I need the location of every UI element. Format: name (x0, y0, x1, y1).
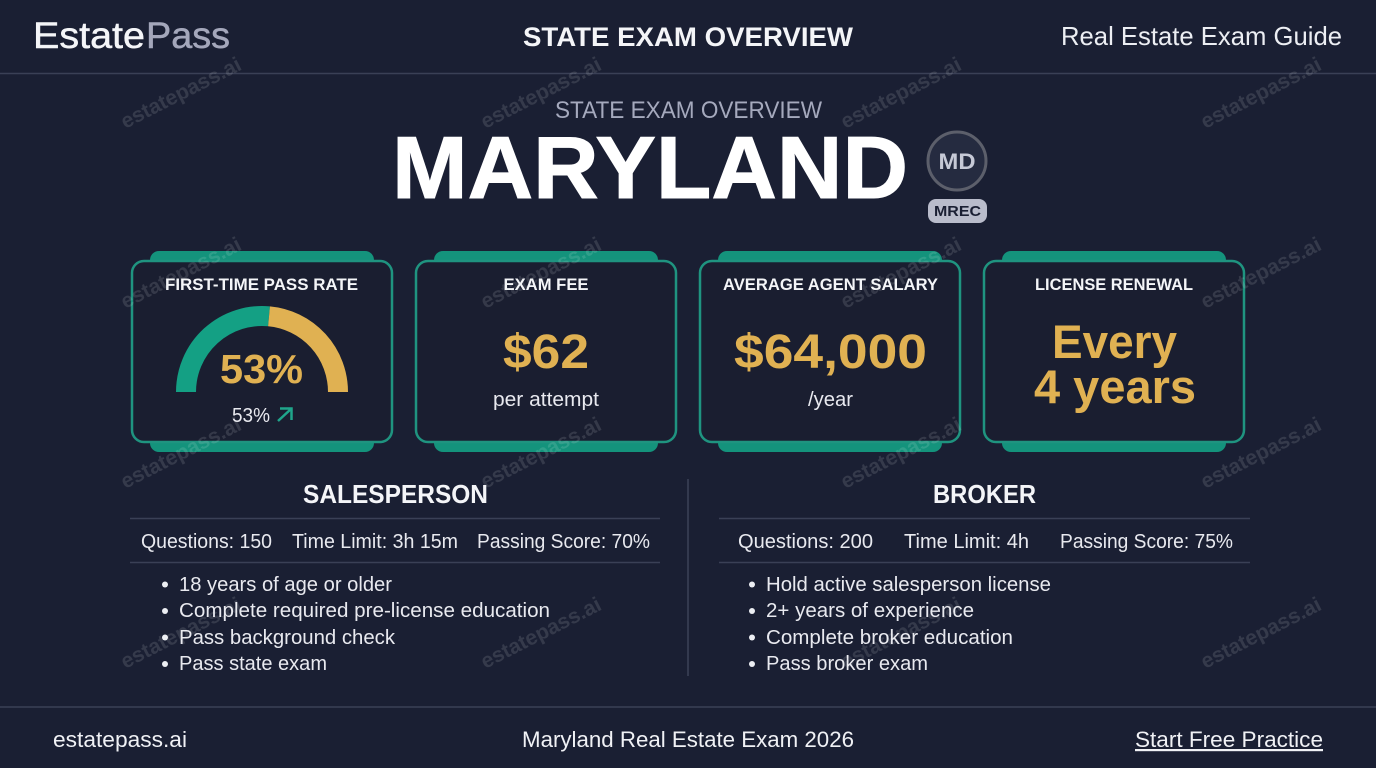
fee unit: per attempt (493, 389, 599, 411)
watermarks: estatepass.ai (477, 413, 605, 493)
watermarks: estatepass.ai (117, 53, 245, 133)
card heading: AVERAGE AGENT SALARY (723, 275, 939, 294)
salesperson stats: Questions: 150 (141, 531, 272, 553)
salary value: $64,000 (734, 326, 927, 379)
state badge: MD (928, 132, 986, 190)
panel: broker (719, 479, 1250, 675)
broker stats: Passing Score: 75% (1060, 531, 1233, 553)
card heading: EXAM FEE (504, 275, 588, 294)
watermarks: estatepass.ai (117, 233, 245, 313)
salesperson requirements (162, 574, 550, 675)
salesperson stats (141, 531, 650, 553)
gauge value: 53% (220, 346, 303, 392)
agency pill: MREC (928, 199, 987, 223)
footer caption: Maryland Real Estate Exam 2026 (522, 727, 854, 752)
small percent: 53% (232, 405, 270, 427)
icon: trend arrow (278, 408, 292, 421)
agency pill: MREC: MREC (934, 203, 981, 220)
salary unit: /year (808, 389, 853, 411)
broker requirements: 2+ years of experience (766, 600, 974, 622)
broker requirements: Pass broker exam (766, 653, 928, 675)
watermarks: estatepass.ai (1197, 233, 1325, 313)
salesperson requirements: Complete required pre-license education (179, 600, 550, 622)
salesperson stats: Time Limit: 3h 15m (292, 531, 458, 553)
panel: average agent salary (700, 251, 960, 452)
salesperson stats: Passing Score: 70% (477, 531, 650, 553)
salesperson requirements: Pass background check (179, 627, 396, 649)
state badge: MD: MD (938, 149, 976, 174)
watermarks: estatepass.ai (477, 593, 605, 673)
card heading: FIRST-TIME PASS RATE (165, 275, 358, 294)
broker stats: Time Limit: 4h (904, 531, 1029, 553)
broker stats: Questions: 200 (738, 531, 873, 553)
panel: first-time pass rate (132, 251, 392, 452)
panel: salesperson (130, 479, 660, 675)
panel: license renewal (984, 251, 1244, 452)
state name title: MARYLAND (392, 118, 908, 217)
watermarks: estatepass.ai (117, 413, 245, 493)
renewal value: 4 years (1034, 360, 1196, 413)
broker requirements: Complete broker education (766, 627, 1013, 649)
subtitle: STATE EXAM OVERVIEW (555, 97, 822, 124)
renewal value: Every (1052, 315, 1177, 368)
salesperson requirements: 18 years of age or older (179, 574, 392, 596)
broker requirements (749, 574, 1051, 675)
header guide label: Real Estate Exam Guide (1061, 21, 1342, 51)
watermarks (117, 53, 1325, 673)
watermarks: estatepass.ai (837, 593, 965, 673)
gauge chart (186, 316, 338, 392)
watermarks: estatepass.ai (477, 233, 605, 313)
header title: STATE EXAM OVERVIEW (523, 22, 854, 52)
footer call to action: Start Free Practice (1135, 727, 1323, 752)
salesperson requirements: Pass state exam (179, 653, 327, 675)
renewal value (1034, 315, 1196, 413)
watermarks: estatepass.ai (837, 413, 965, 493)
footer site: estatepass.ai (53, 727, 187, 752)
logo: Estate (33, 15, 145, 56)
fee value: $62 (503, 326, 589, 379)
footer bar (0, 707, 1376, 752)
watermarks: estatepass.ai (477, 53, 605, 133)
logo (33, 15, 230, 56)
salesperson heading: SALESPERSON (303, 479, 488, 509)
watermarks: estatepass.ai (837, 53, 965, 133)
watermarks: estatepass.ai (1197, 53, 1325, 133)
watermarks: estatepass.ai (1197, 593, 1325, 673)
broker heading: BROKER (933, 479, 1036, 509)
watermarks: estatepass.ai (1197, 413, 1325, 493)
broker stats (738, 531, 1233, 553)
logo: Pass (146, 15, 230, 56)
broker requirements: Hold active salesperson license (766, 574, 1051, 596)
header bar (0, 15, 1376, 74)
panel: exam fee (416, 251, 676, 452)
card heading: LICENSE RENEWAL (1035, 275, 1193, 294)
watermarks: estatepass.ai (837, 233, 965, 313)
watermarks: estatepass.ai (117, 593, 245, 673)
